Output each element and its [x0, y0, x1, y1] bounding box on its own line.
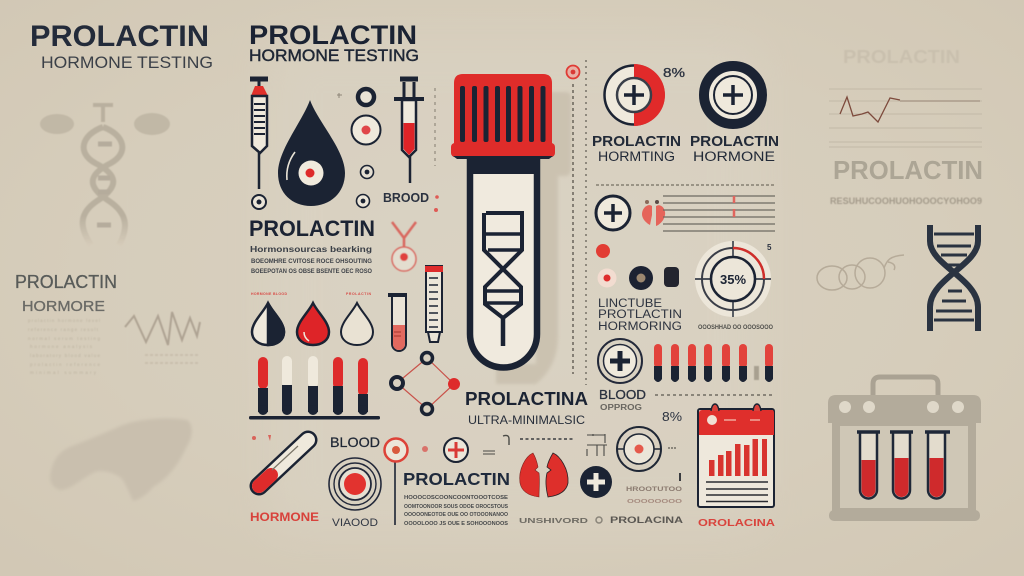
text block: prolactin lower: OOMTOONOOR SOUS ODOE OROCSTOUS	[404, 504, 508, 510]
faint text block: minimal summary	[30, 370, 97, 375]
icon: DNA helix	[930, 225, 978, 331]
label: 8% lower: 8%	[662, 409, 682, 424]
faint hormone wave	[125, 312, 200, 363]
icon: target with red core	[617, 427, 676, 471]
panel: central column glow	[270, 40, 760, 530]
small dash marks	[483, 435, 575, 454]
text block: incube prolactin hormoring: OOOSHHAD OO OOOSOOO	[698, 325, 773, 331]
label: prolactina ultra-minimalsic: PROLACTINA	[465, 388, 588, 409]
main title: HORMONE TESTING	[249, 46, 419, 65]
red specks	[434, 195, 439, 212]
icon: plus circle with chart lines	[596, 196, 775, 231]
labels: bottom strip: UNSHIVORD	[519, 516, 589, 525]
faint prolactin label: PROLACTIN	[833, 155, 983, 185]
label: brood: BROOD	[383, 191, 429, 205]
labels: hormone viaood	[250, 510, 378, 529]
icon: molecule network	[391, 352, 460, 414]
labels under dials: HORMTING	[598, 149, 675, 164]
labels: bottom strip: PROLACINA	[610, 515, 684, 525]
faint brain silhouette	[50, 418, 192, 501]
icon: small ring under syringe	[252, 195, 266, 209]
text block: prolactin hormone testing: BOEOMHRE CVITOSE ROCE OHSOUTING	[251, 259, 372, 265]
label: prolactina ultra-minimalsic: ULTRA-MINIMALSIC	[468, 413, 585, 427]
dashed row	[655, 394, 775, 396]
icon: half red plus dial	[604, 64, 665, 126]
faint text block	[28, 318, 100, 375]
small red labels	[251, 292, 371, 296]
icon: navy ring plus dial	[704, 66, 762, 124]
labels: hormone viaood: HORMONE	[250, 510, 319, 524]
icon: red dot target	[566, 66, 580, 78]
left hormone label: HORMORE	[22, 299, 105, 315]
small red labels: HORMONE BLOOD	[251, 292, 287, 296]
label: blood opprog: BLOOD	[599, 388, 646, 402]
text block: incube prolactin hormoring: HORMORING	[598, 321, 682, 333]
chart: vertical blood bars	[249, 356, 380, 420]
icon: syringe with blood	[394, 79, 424, 183]
labels under dials	[592, 133, 779, 164]
tube body	[470, 160, 537, 368]
main title	[249, 20, 419, 65]
main title: PROLACTIN	[249, 20, 417, 50]
text block: prolactin lower	[403, 469, 510, 527]
faint text block: hormone analysis	[30, 344, 93, 349]
label: prolactina ultra-minimalsic	[465, 388, 588, 427]
tube cap	[451, 74, 555, 159]
icon: main test tube	[451, 74, 571, 384]
text block: prolactin hormone testing	[249, 216, 375, 275]
icon: syringe left	[250, 79, 268, 189]
left title: PROLACTIN	[30, 20, 209, 53]
chart: right blood bars	[654, 344, 773, 382]
left title	[30, 20, 213, 72]
faint prolactin label: RESUHUCOOHUOHOOOCYOHOO9	[830, 196, 982, 206]
text block: prolactin hormone testing: PROLACTIN	[249, 216, 375, 241]
icon: lungs	[520, 453, 568, 497]
faint text block: normal serum testing	[28, 336, 100, 341]
faint prolactin label	[830, 155, 983, 206]
left hormone label	[15, 272, 117, 315]
panel: right faded column	[817, 47, 983, 521]
panel: left faded column	[15, 20, 213, 501]
icon: red Y connector	[392, 222, 416, 271]
labels under dials: PROLACTIN	[690, 133, 779, 150]
label: 8%: 8%	[663, 65, 686, 80]
icon: faded DNA with uterus shape	[40, 105, 170, 245]
icon: small structure	[587, 434, 607, 456]
text block: small red-grey labels	[626, 473, 683, 505]
labels under dials: HORMONE	[693, 149, 775, 164]
icon: three drops	[252, 303, 373, 345]
icon: small circles group	[337, 89, 380, 208]
tube shadow	[496, 92, 571, 384]
icon: plus circle red	[444, 438, 468, 462]
chart: gauge 35%: 35%	[720, 272, 746, 287]
icon: pin with red dot	[384, 438, 408, 525]
labels: hormone viaood: VIAOOD	[332, 517, 378, 529]
text block: prolactin lower: OOOOLOOO JS OUE E SOHOOONOOS	[404, 521, 508, 527]
label: blood: BLOOD	[330, 434, 380, 450]
icon: small test tube	[388, 295, 407, 351]
faint text block: prolactin reference	[30, 362, 100, 367]
faint title: PROLACTIN	[843, 47, 960, 67]
label: blood opprog	[599, 388, 646, 412]
text block: incube prolactin hormoring: PROTLACTIN	[598, 309, 682, 321]
icon: test tube case	[828, 377, 981, 521]
vertical dashes beside syringe	[434, 88, 436, 166]
icon: large blood drop	[278, 100, 345, 206]
text block: prolactin lower: HOOOCOSCOONCOONTOOOTCOSE	[404, 495, 508, 501]
vertical dashed dividers	[573, 60, 586, 385]
text block: small red-grey labels: HROOTUTOO	[626, 486, 682, 493]
labels: bottom strip: OROLACINA	[698, 518, 775, 529]
icon: red and dark dots row	[596, 244, 679, 290]
faint text block: reference range result	[28, 327, 99, 332]
icon: capsule thermometer	[259, 440, 308, 486]
icon: concentric target	[329, 458, 381, 510]
left title: HORMONE TESTING	[41, 53, 213, 72]
icon: calendar chart	[698, 404, 774, 507]
case tubes	[857, 432, 950, 498]
labels: bottom strip	[519, 515, 775, 529]
labels under dials: PROLACTIN	[592, 133, 681, 150]
red small marks	[252, 435, 271, 441]
icon: graduated tube	[425, 266, 443, 342]
chart: gauge 35%	[695, 241, 772, 317]
faint text block: laboratory blood value	[30, 353, 100, 358]
faint text block: prolactin hormone level	[28, 318, 100, 323]
text block: small red-grey labels: OOOOOOOO	[627, 499, 683, 505]
label: blood opprog: OPPROG	[600, 403, 642, 412]
red dot	[422, 446, 428, 452]
text block: prolactin lower: PROLACTIN	[403, 469, 510, 489]
DNA glyph inside tube	[484, 213, 522, 346]
icon: faint ring chain	[817, 255, 904, 290]
faint line chart	[829, 89, 982, 147]
horizontal dashed divider	[596, 184, 776, 186]
left hormone label: PROLACTIN	[15, 272, 117, 292]
text block: prolactin hormone testing: Hormonsourcas bearking	[250, 244, 372, 254]
text block: prolactin hormone testing: BOEEPOTAN OS OBSE BSENTE OEC ROSO	[251, 269, 372, 275]
text block: prolactin lower: OOOOONEOTOE OUE OO OTOOONANOO	[404, 512, 509, 518]
icon: navy plus circle	[580, 466, 612, 498]
small red labels: PROLACTIN	[346, 292, 371, 296]
text block: incube prolactin hormoring	[598, 298, 773, 333]
chart: gauge 35%: 5	[767, 243, 772, 252]
text block: incube prolactin hormoring: LINCTUBE	[598, 298, 662, 310]
icon: ringed plus	[598, 339, 642, 383]
